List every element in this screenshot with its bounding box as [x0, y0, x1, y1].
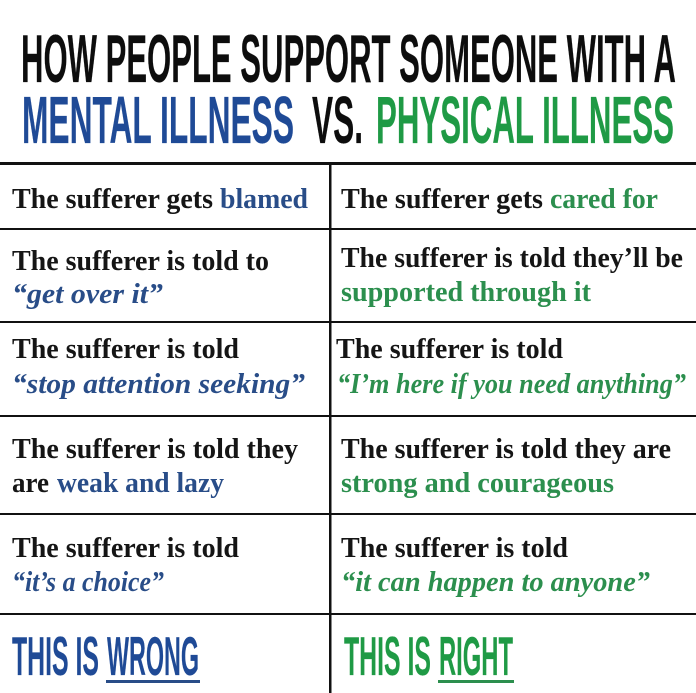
row 4 left: weak and lazy — [57, 468, 224, 499]
row 3 right: The sufferer is told — [336, 334, 563, 365]
text: RIGHT — [439, 625, 513, 687]
title: MENTAL ILLNESS — [22, 83, 294, 158]
row 4 left — [12, 434, 298, 499]
row 5 right: The sufferer is told — [341, 533, 568, 564]
row 2 right — [341, 243, 683, 308]
row 2 left: “get over it” — [12, 279, 163, 310]
row 3 left: “stop attention seeking” — [12, 369, 305, 400]
row 2 left: The sufferer is told to — [12, 246, 269, 277]
row 3 left: The sufferer is told — [12, 334, 239, 365]
row 1 right: The sufferer gets — [341, 184, 543, 215]
verdict: this is wrong: THIS IS — [12, 625, 99, 687]
verdict: this is right: THIS IS — [344, 625, 431, 687]
row 2 right: The sufferer is told they’ll be — [341, 243, 683, 274]
row 5 left: The sufferer is told — [12, 533, 239, 564]
row 1 left — [12, 184, 308, 215]
row 4 left: are — [12, 468, 49, 499]
row 3 left — [12, 334, 305, 400]
row 3 right — [336, 334, 686, 400]
title: VS. — [312, 83, 363, 158]
row 2 left — [12, 246, 269, 310]
row 1 right — [341, 184, 658, 215]
row 4 right — [341, 434, 671, 499]
row 5 left: “it’s a choice” — [12, 567, 164, 598]
title — [21, 21, 676, 158]
comparison table grid — [0, 162, 696, 693]
row 5 right: “it can happen to anyone” — [341, 567, 650, 598]
row 5 left — [12, 533, 239, 598]
row 2 right: supported through it — [341, 277, 591, 308]
row 4 left: The sufferer is told they — [12, 434, 298, 465]
row 5 right — [341, 533, 650, 598]
row 4 right: strong and courageous — [341, 468, 614, 499]
text: WRONG — [107, 625, 199, 687]
row 1 right: cared for — [550, 184, 658, 215]
row 1 left: blamed — [220, 184, 308, 215]
row 1 left: The sufferer gets — [12, 184, 213, 215]
row 4 right: The sufferer is told they are — [341, 434, 671, 465]
